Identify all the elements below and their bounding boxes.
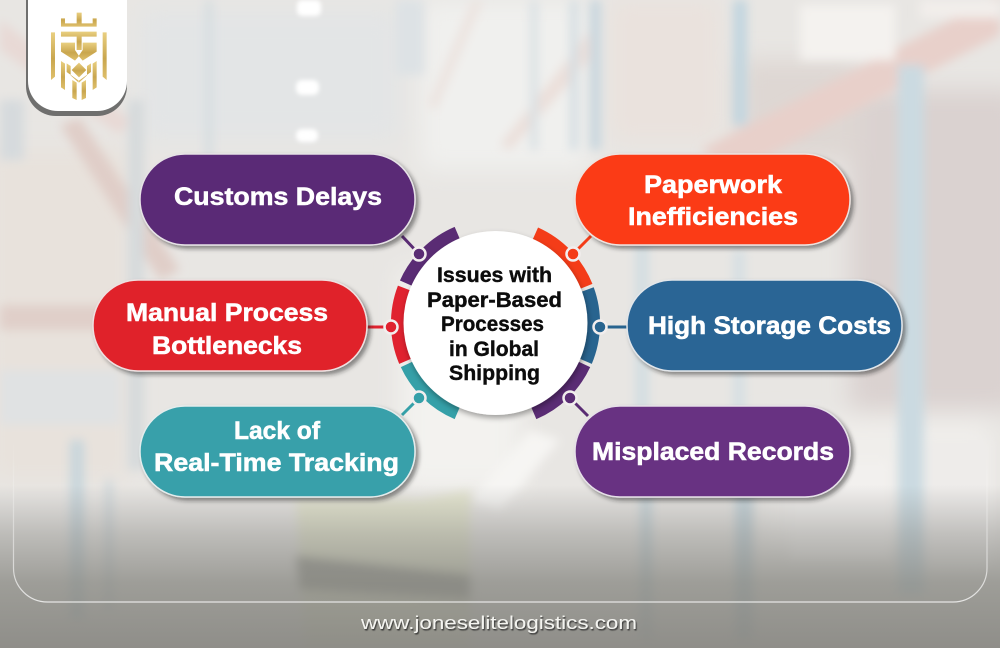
title: Issues with (437, 264, 552, 287)
title: Processes (441, 313, 544, 336)
title (427, 264, 562, 385)
pill: Customs Delays (140, 154, 415, 245)
bottom frame outline (14, 440, 987, 602)
pill: Customs Delays: Customs Delays (174, 183, 382, 211)
pill: Manual Process Bottlenecks: Manual Process (126, 299, 328, 327)
pill: Misplaced Records: Misplaced Records (592, 438, 834, 466)
title: in Global (449, 338, 539, 361)
connector lines (365, 236, 627, 416)
pill: Misplaced Records (575, 406, 850, 497)
pill: High Storage Costs (627, 280, 902, 371)
pill: Lack of Real-Time Tracking (140, 406, 415, 497)
title: Paper-Based (427, 289, 562, 312)
pill: High Storage Costs: High Storage Costs (648, 312, 891, 340)
segmented ring (397, 233, 594, 413)
pill: Manual Process Bottlenecks: Bottlenecks (152, 332, 302, 360)
pill: Lack of Real-Time Tracking: Lack of (234, 417, 321, 445)
pill: Manual Process Bottlenecks (93, 280, 367, 371)
centre circle with title (404, 231, 588, 415)
pill: Lack of Real-Time Tracking: Real-Time Tracking (154, 449, 399, 477)
pill: Paperwork Inefficiencies: Inefficiencies (628, 203, 798, 231)
badge panel (28, 0, 127, 111)
icon: gold crown shield (51, 13, 107, 100)
pill: Paperwork Inefficiencies (575, 154, 850, 245)
background: bottom grey fade (0, 485, 1000, 648)
website url: www.joneselitelogistics.com (360, 613, 637, 633)
title: Shipping (449, 362, 540, 385)
logo badge (26, 0, 127, 116)
pill: Paperwork Inefficiencies: Paperwork (644, 171, 782, 199)
node dots (384, 248, 606, 404)
badge shadow (26, 0, 127, 116)
